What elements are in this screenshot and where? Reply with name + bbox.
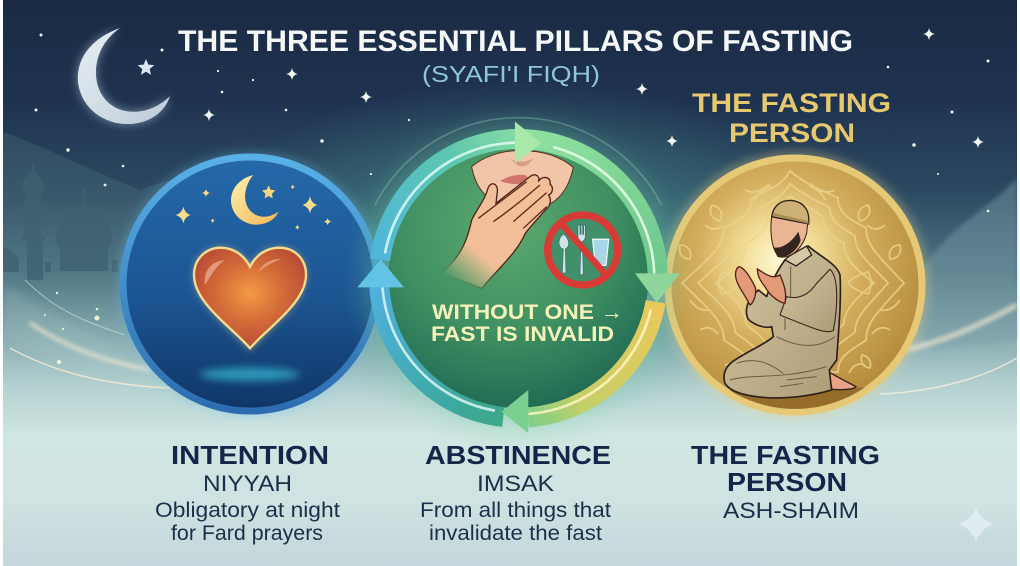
panel: intention circle <box>117 151 383 417</box>
panel: abstinence circle <box>357 118 680 434</box>
icon: praying man <box>724 200 856 398</box>
text block: the fasting person: THE FASTING <box>691 440 880 470</box>
heading: the fasting person gold: THE FASTING <box>692 88 891 118</box>
text block: abstinence: ABSTINENCE <box>425 440 611 470</box>
heading: the fasting person gold <box>692 88 891 148</box>
text block: the fasting person <box>691 440 880 523</box>
icon: sparkle watermark <box>958 507 994 542</box>
text block: abstinence <box>420 440 611 545</box>
ring arrows <box>357 118 680 433</box>
text block: abstinence: invalidate the fast <box>429 522 602 545</box>
callout: without one fast is invalid: FAST IS INVALID <box>431 323 614 346</box>
title: THE THREE ESSENTIAL PILLARS OF FASTING <box>178 25 853 58</box>
subtitle: (SYAFI'I FIQH) <box>422 61 600 87</box>
text block: intention <box>155 440 340 545</box>
icon: night moon and stars <box>176 175 331 381</box>
icon: glowing heart <box>194 248 306 351</box>
icon: crescent moon and star <box>78 28 170 124</box>
callout: without one fast is invalid: WITHOUT ONE → <box>432 301 623 324</box>
text block: abstinence: IMSAK <box>477 471 554 496</box>
text block: the fasting person: PERSON <box>727 467 847 497</box>
text block: intention: Obligatory at night <box>155 499 340 522</box>
text block: abstinence: From all things that <box>420 499 611 522</box>
icon: face and hand <box>442 151 573 288</box>
stars <box>34 28 990 212</box>
text block: intention: INTENTION <box>171 440 329 470</box>
callout: without one fast is invalid <box>431 301 623 346</box>
ground shadow <box>730 387 865 409</box>
title <box>178 25 853 87</box>
ornament: arch pattern <box>679 171 904 373</box>
text block: the fasting person: ASH-SHAIM <box>723 498 859 523</box>
icon: no food or drink <box>548 215 618 285</box>
text block: intention: for Fard prayers <box>171 522 323 545</box>
text block: intention: NIYYAH <box>203 471 292 496</box>
heading: the fasting person gold: PERSON <box>729 118 855 148</box>
mosque silhouette <box>3 162 118 280</box>
panel: fasting person circle <box>660 151 930 430</box>
